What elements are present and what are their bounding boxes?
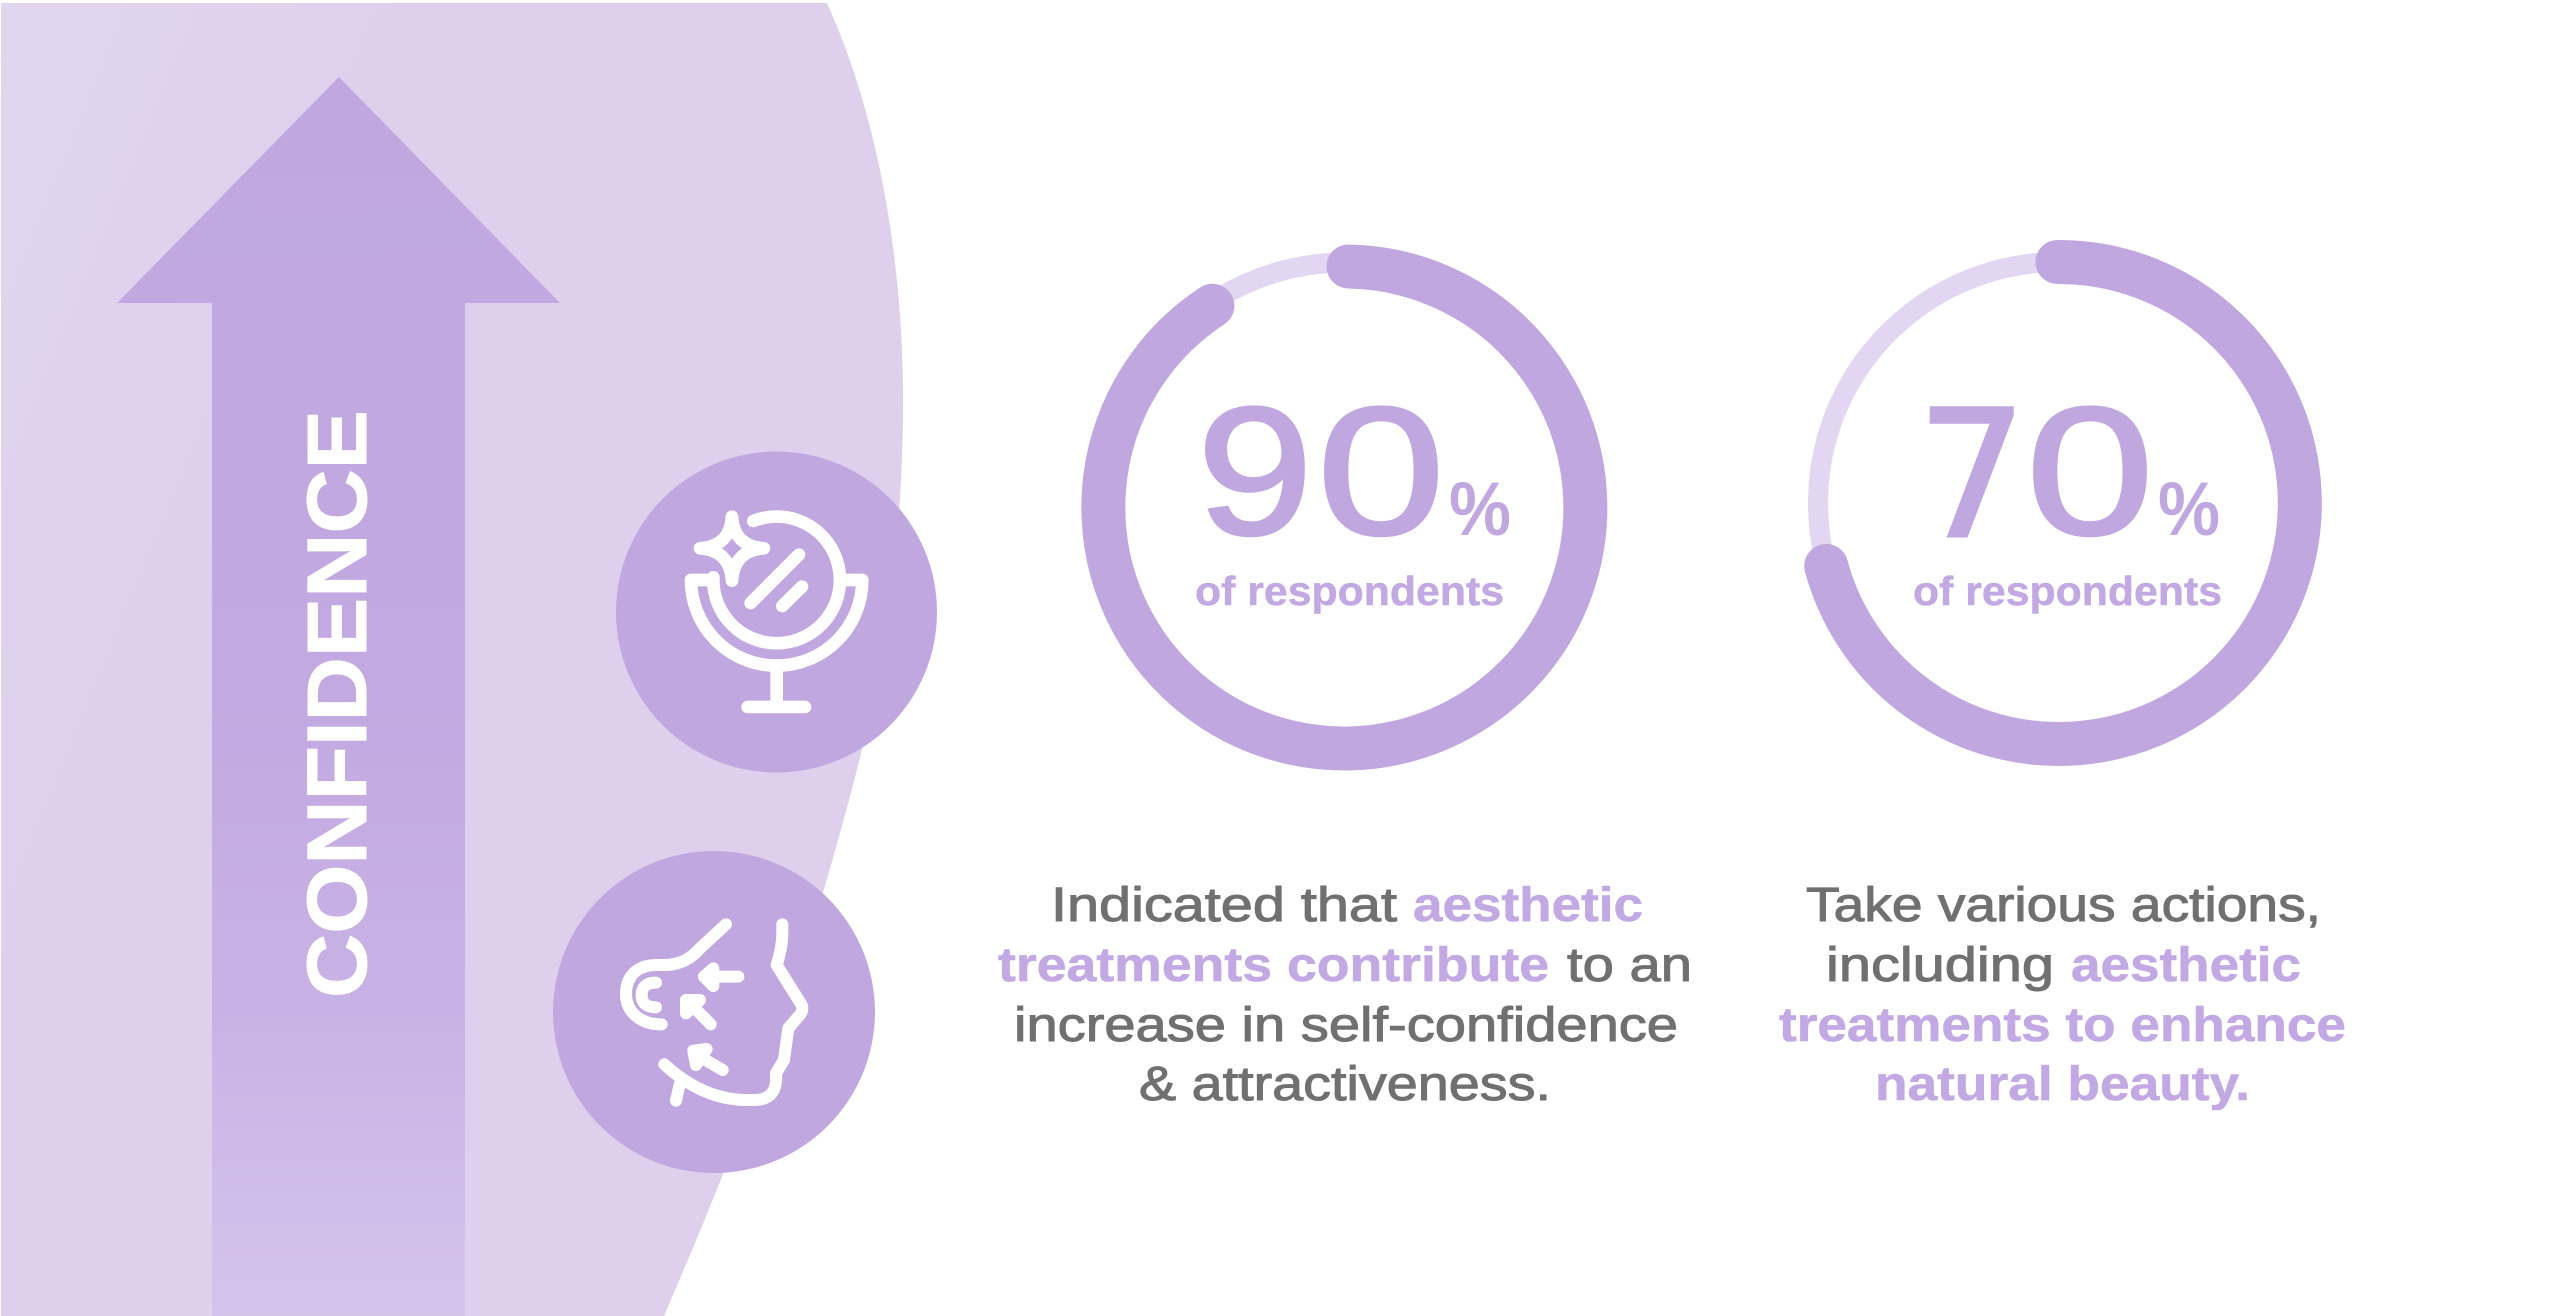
text block: various actions: aesthetic — [2071, 939, 2301, 992]
text block: aesthetic treatments contribute: increase in self-confidence — [1014, 999, 1678, 1052]
text block: various actions: natural beauty. — [1875, 1058, 2250, 1111]
caption: of respondents: of respondents — [1913, 568, 2222, 614]
value: 70%: 0 — [2026, 369, 2154, 573]
text block: aesthetic treatments contribute: Indicated that — [1051, 879, 1397, 932]
donut chart: 90 percent — [1100, 262, 1590, 752]
text block: aesthetic treatments contribute: to an — [1567, 939, 1692, 992]
text block: various actions — [1779, 879, 2346, 1111]
value: 70%: 7 — [1917, 373, 2027, 578]
text block: various actions: including — [1826, 939, 2054, 992]
value: 90% — [1197, 369, 1511, 573]
value: 90%: 9 — [1197, 369, 1313, 573]
icon: mirror with sparkle — [691, 517, 862, 707]
text block: various actions: Take various actions, — [1806, 879, 2321, 932]
text block: aesthetic treatments contribute: & attractiveness. — [1139, 1058, 1551, 1111]
background curved panel — [1, 3, 903, 1316]
text block: various actions: treatments to enhance — [1779, 999, 2346, 1052]
icon badge: face — [553, 851, 875, 1173]
caption: of respondents: of respondents — [1195, 568, 1504, 614]
value: 70%: % — [2158, 467, 2220, 552]
text block: aesthetic treatments contribute: aesthetic — [1413, 879, 1643, 932]
text block: aesthetic treatments contribute: treatments contribute — [998, 939, 1549, 992]
value: 90%: % — [1449, 467, 1511, 552]
value: 70% — [1917, 369, 2220, 578]
value: 90%: 0 — [1317, 369, 1445, 573]
text block: aesthetic treatments contribute — [998, 879, 1692, 1111]
icon badge: mirror — [616, 452, 937, 772]
icon: face profile with lifting arrows — [626, 924, 802, 1101]
donut chart: 70 percent — [1818, 262, 2300, 744]
arrow label: CONFIDENCE — [290, 410, 384, 998]
arrow: confidence — [117, 77, 560, 1316]
